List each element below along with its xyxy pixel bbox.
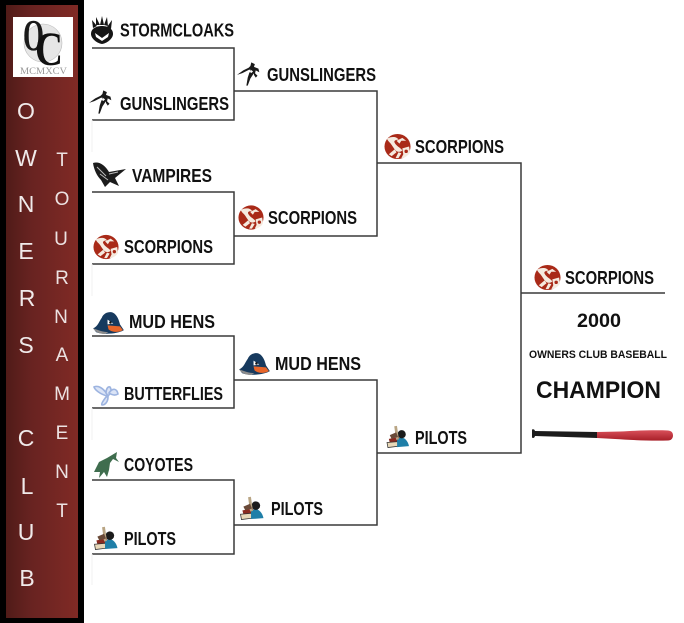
vertical title: TOURNAMENT: E xyxy=(56,423,68,444)
team: Pilots round 2: PILOTS xyxy=(271,499,323,519)
vertical title: OWNERS CLUB: S xyxy=(18,332,34,358)
team: Scorpions round 1 xyxy=(93,235,213,259)
team: Gunslingers round 2 xyxy=(237,62,376,86)
team: Butterflies xyxy=(94,384,223,405)
icon: pilots xyxy=(94,527,118,550)
team: Coyotes xyxy=(94,452,193,478)
logo: Owners Club: O xyxy=(23,11,44,60)
vertical title: TOURNAMENT: N xyxy=(55,462,69,483)
icon: scorpion xyxy=(238,205,264,230)
vertical title: OWNERS CLUB: E xyxy=(18,238,34,264)
vertical title: OWNERS CLUB: O xyxy=(17,98,35,124)
team: Scorpions semifinal: SCORPIONS xyxy=(415,137,504,157)
vertical title: OWNERS CLUB: R xyxy=(19,285,35,311)
team: Scorpions final xyxy=(534,265,654,290)
icon: pilots xyxy=(240,497,264,520)
team: Scorpions round 2 xyxy=(238,205,357,230)
vertical title: TOURNAMENT: A xyxy=(56,345,69,366)
vertical title: OWNERS CLUB: U xyxy=(18,519,34,545)
team: Vampires xyxy=(93,162,212,187)
vertical title: TOURNAMENT: T xyxy=(56,150,68,171)
champion league name: OWNERS CLUB BASEBALL xyxy=(529,349,667,361)
team: Pilots semifinal: PILOTS xyxy=(415,428,467,448)
icon: mud hen xyxy=(93,312,124,334)
team: Coyotes: COYOTES xyxy=(124,455,193,475)
team: Mud Hens round 1: MUD HENS xyxy=(129,312,215,332)
vertical title: OWNERS CLUB: L xyxy=(21,473,34,499)
team: Mud Hens round 2: MUD HENS xyxy=(275,354,361,374)
icon: gunslinger xyxy=(89,90,111,114)
logo: Owners Club: MCMXCV xyxy=(20,67,67,77)
team: Stormcloaks: STORMCLOAKS xyxy=(120,20,234,40)
team: Gunslingers round 2: GUNSLINGERS xyxy=(267,65,376,85)
vertical title: TOURNAMENT: N xyxy=(54,307,68,328)
icon: gunslinger xyxy=(237,62,259,86)
icon: scorpion xyxy=(93,235,119,259)
logo: Owners Club xyxy=(13,11,73,77)
team: Pilots round 1 xyxy=(94,527,176,550)
vertical title: TOURNAMENT: R xyxy=(55,268,69,289)
team: Gunslingers round 1: GUNSLINGERS xyxy=(120,94,229,114)
team: Pilots semifinal xyxy=(387,426,467,448)
vertical title: OWNERS CLUB: C xyxy=(18,425,34,451)
team: Vampires: VAMPIRES xyxy=(132,166,212,186)
team: Butterflies: BUTTERFLIES xyxy=(124,384,223,404)
team: Mud Hens round 2 xyxy=(239,353,361,375)
champion year: 2000 xyxy=(577,311,621,332)
icon: baseball bat xyxy=(532,429,673,441)
vertical title: TOURNAMENT xyxy=(54,150,70,522)
vertical title: OWNERS CLUB: N xyxy=(18,191,34,217)
team: Scorpions semifinal xyxy=(384,134,504,159)
icon: scorpion xyxy=(534,265,561,290)
icon: bear claw xyxy=(91,16,113,44)
vertical title: OWNERS CLUB xyxy=(15,98,37,591)
vertical title: TOURNAMENT: U xyxy=(54,229,68,250)
icon: butterfly xyxy=(94,386,118,405)
vertical title: TOURNAMENT: O xyxy=(55,189,69,210)
team: Scorpions round 1: SCORPIONS xyxy=(124,237,213,257)
panel: tournament sidebar xyxy=(6,5,78,618)
vertical title: OWNERS CLUB: B xyxy=(19,565,35,591)
icon: scorpion xyxy=(384,134,411,159)
team: Gunslingers round 1 xyxy=(89,90,229,114)
team: Scorpions final: SCORPIONS xyxy=(565,268,654,288)
team: Mud Hens round 1 xyxy=(93,312,215,334)
icon: vampire bat xyxy=(93,162,126,187)
vertical title: TOURNAMENT: T xyxy=(56,501,68,522)
champion heading: CHAMPION xyxy=(536,377,661,404)
logo: Owners Club: C xyxy=(35,23,63,76)
team: Scorpions round 2: SCORPIONS xyxy=(268,208,357,228)
bracket lines xyxy=(92,48,665,554)
icon: coyote xyxy=(94,452,119,478)
vertical title: OWNERS CLUB: W xyxy=(15,145,37,171)
team: Pilots round 1: PILOTS xyxy=(124,529,176,549)
icon: mud hen xyxy=(239,353,270,375)
vertical title: TOURNAMENT: M xyxy=(54,384,70,405)
team: Pilots round 2 xyxy=(240,497,323,520)
team: Stormcloaks xyxy=(91,16,234,44)
icon: pilots xyxy=(387,426,409,448)
black sidebar backing xyxy=(0,0,84,623)
